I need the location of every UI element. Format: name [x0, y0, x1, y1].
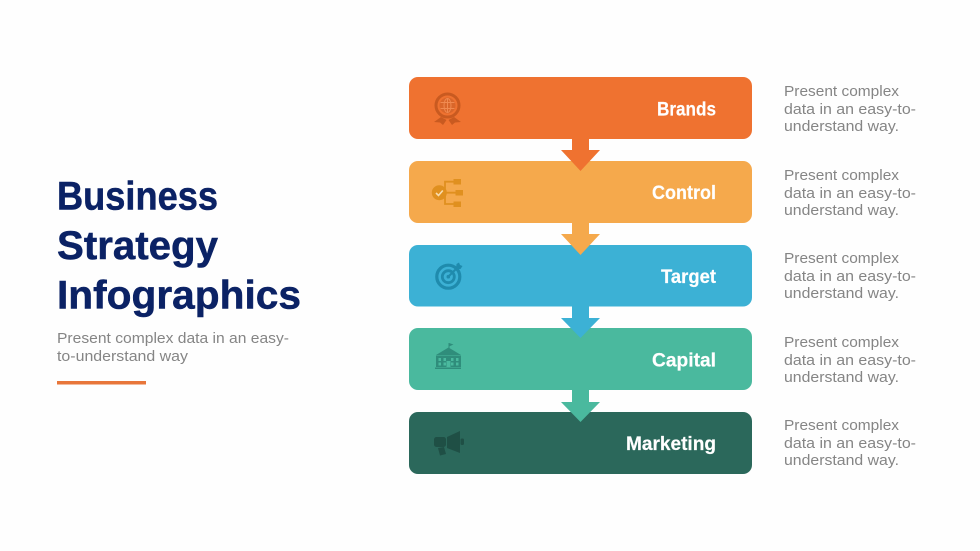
icon: bank building	[435, 343, 461, 369]
arrow: Brands to Control	[561, 139, 600, 171]
subtitle: Present complex data in an easy-	[57, 330, 289, 347]
title: Infographics	[57, 274, 301, 318]
description: Target: data in an easy-to-	[784, 268, 916, 285]
description: Brands	[784, 83, 916, 135]
title: Business	[57, 174, 218, 218]
icon: target	[437, 262, 462, 288]
description: Target: understand way.	[784, 285, 899, 302]
description: Control	[784, 167, 916, 219]
arrow: Target to Capital	[561, 306, 600, 338]
icon: megaphone	[434, 431, 464, 456]
bar: Control	[409, 161, 752, 223]
description: Brands: data in an easy-to-	[784, 101, 916, 118]
description: Marketing: data in an easy-to-	[784, 435, 916, 452]
bar: Target	[409, 245, 752, 306]
subtitle: to-understand way	[57, 348, 189, 365]
bar: Brands	[409, 77, 752, 139]
title: Strategy	[57, 224, 218, 268]
arrow: Control to Target	[561, 223, 600, 255]
accent rule	[57, 381, 146, 384]
bar: Marketing	[409, 412, 752, 474]
description: Brands: understand way.	[784, 118, 899, 135]
icon: globe award	[434, 94, 461, 125]
label: Control: Control	[652, 183, 716, 204]
label: Target: Target	[661, 267, 717, 288]
description: Control: understand way.	[784, 202, 899, 219]
description: Target	[784, 250, 916, 302]
arrow: Capital to Marketing	[561, 390, 600, 422]
description: Brands: Present complex	[784, 83, 900, 100]
icon: control flow	[432, 179, 463, 207]
label: Brands: Brands	[657, 100, 716, 120]
description: Marketing	[784, 417, 916, 469]
bar: Capital	[409, 328, 752, 390]
title	[57, 174, 301, 318]
description: Capital: understand way.	[784, 369, 899, 386]
description: Control: data in an easy-to-	[784, 185, 916, 202]
label: Marketing: Marketing	[626, 434, 716, 455]
description: Capital: data in an easy-to-	[784, 352, 916, 369]
description: Capital	[784, 334, 916, 386]
description: Target: Present complex	[784, 250, 900, 267]
label: Capital: Capital	[652, 350, 716, 372]
description: Marketing: Present complex	[784, 417, 900, 434]
description: Marketing: understand way.	[784, 452, 899, 469]
subtitle	[57, 330, 289, 365]
description: Control: Present complex	[784, 167, 900, 184]
description: Capital: Present complex	[784, 334, 900, 351]
